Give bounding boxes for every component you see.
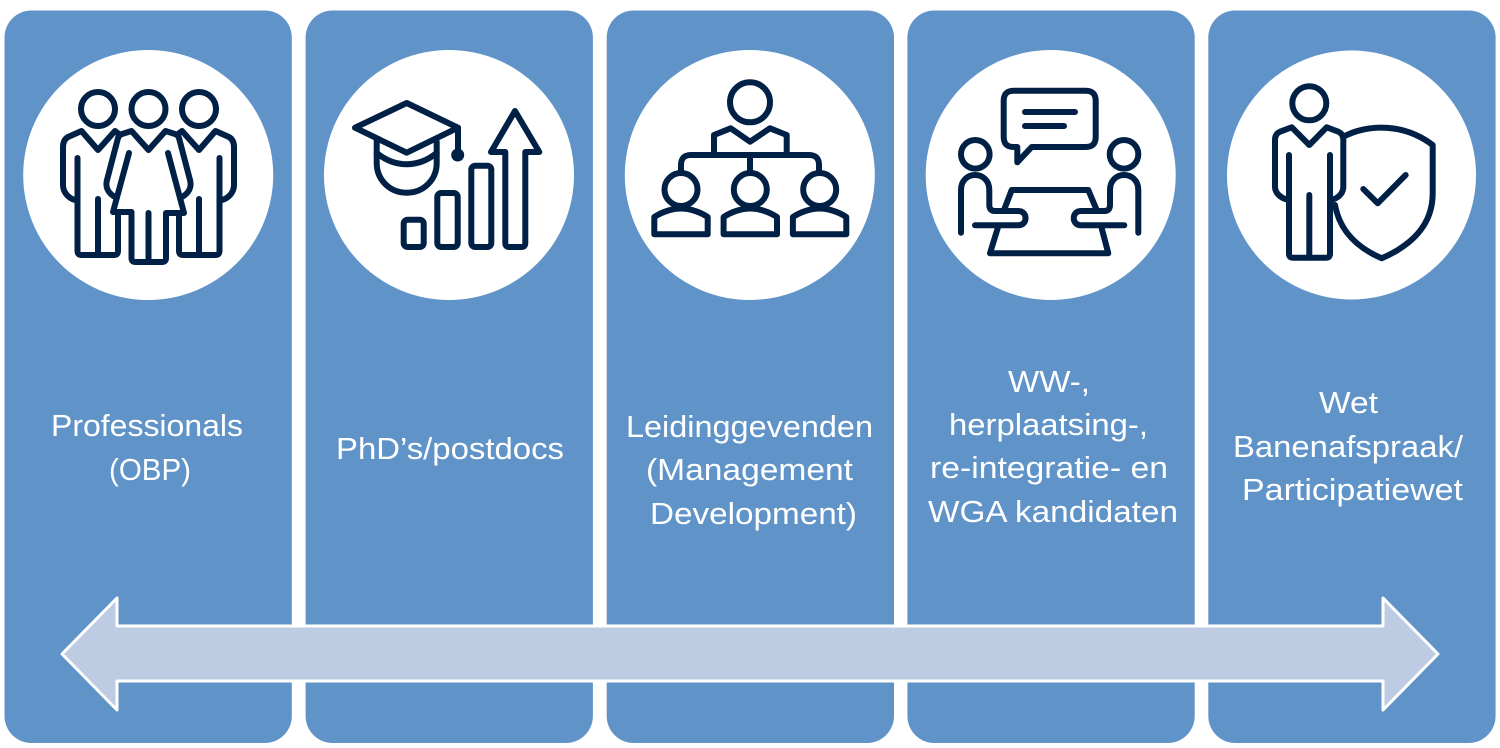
label: WW, herplaatsing, re-integratie en WGA: WW-, (1008, 364, 1090, 399)
panel: Wet Banenafspraak/Participatiewet (1208, 10, 1496, 743)
label: WW, herplaatsing, re-integratie en WGA: re-integratie- en (930, 450, 1168, 485)
label: WW, herplaatsing, re-integratie en WGA: herplaatsing-, (949, 407, 1148, 442)
icon: graduation cap and growth bars (355, 103, 539, 247)
label: WW, herplaatsing, re-integratie en WGA: WGA kandidaten (928, 494, 1178, 529)
label: Leidinggevenden (626, 409, 873, 531)
icon circle: Professionals (23, 50, 273, 300)
label: Wet Banenafspraak/Participatiewet: Wet (1319, 385, 1378, 420)
label: Professionals (51, 408, 243, 487)
icon circle: WW (926, 50, 1176, 300)
icon circle: Wet Banenafspraak (1227, 50, 1476, 300)
icon: organisation chart (654, 82, 846, 234)
label: WW, herplaatsing, re-integratie en WGA (928, 364, 1178, 529)
icon circle: Leidinggevenden (625, 50, 875, 300)
icon: person with shield (1275, 86, 1433, 258)
label: Professionals: Professionals (51, 408, 243, 443)
label: Professionals: (OBP) (109, 452, 191, 487)
panel: WW, herplaatsing, re-integratie en WGA (907, 10, 1195, 743)
panel: Leidinggevenden (607, 10, 894, 743)
label: Wet Banenafspraak/Participatiewet (1233, 385, 1463, 507)
icon circle: PhD's/postdocs (324, 50, 574, 300)
label: PhD's/postdocs: PhD’s/postdocs (336, 431, 564, 466)
icon: two people talking at a table (961, 91, 1138, 253)
arrow: double-headed (62, 598, 1438, 710)
label: Wet Banenafspraak/Participatiewet: Banenafspraak/ (1233, 429, 1463, 464)
label: Leidinggevenden: Leidinggevenden (626, 409, 873, 444)
icon: group of three people (63, 92, 234, 262)
panel: Professionals (4, 10, 292, 743)
label: Wet Banenafspraak/Participatiewet: Participatiewet (1242, 472, 1463, 507)
label: Leidinggevenden: Development) (650, 496, 857, 531)
panel: PhD's/postdocs (306, 10, 593, 743)
label: Leidinggevenden: (Management (646, 452, 853, 487)
